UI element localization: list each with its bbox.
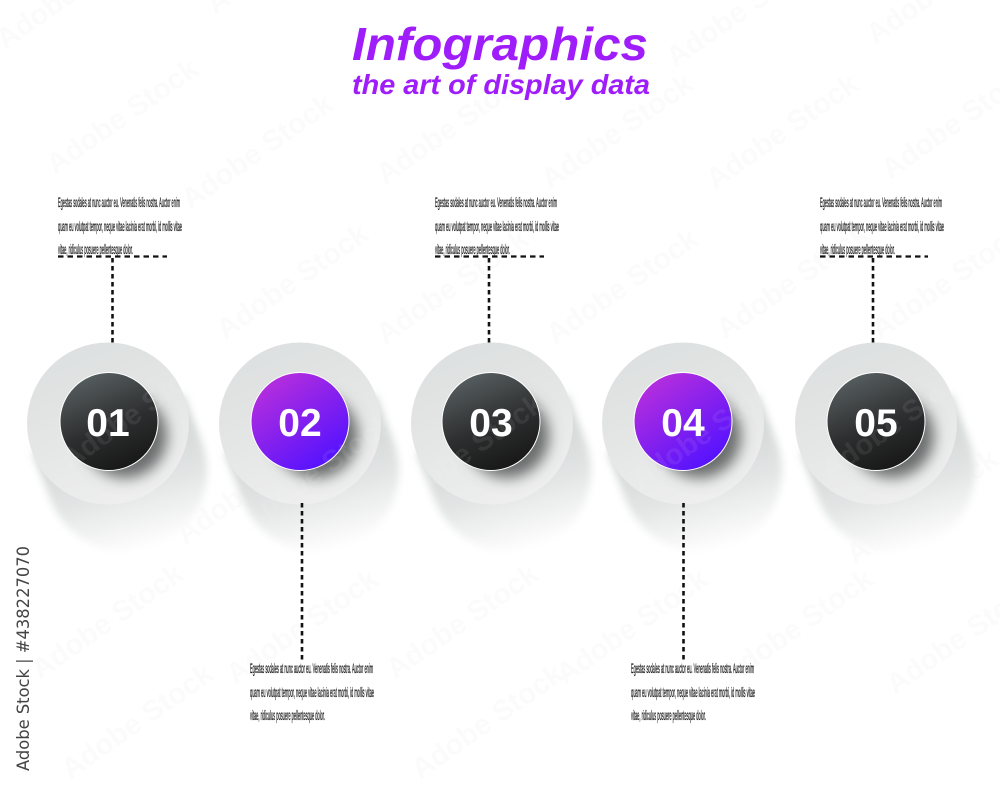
text: quam eu volutpat tempor, neque vitae lacinia erat morbi, id mollis vitae [250,684,374,700]
subheading: the art of display data [352,69,650,100]
watermark pattern: Adobe Stock [41,52,205,181]
watermark over discs: Adobe Stock [816,357,980,486]
underline 01 [58,255,167,258]
text: vitae, ridiculus posuere pellentesque dolor. [631,707,706,723]
watermark over discs: Adobe Stock [236,407,400,536]
connector 03 [488,258,490,344]
title [352,18,650,100]
watermark pattern: Adobe Stock [381,557,545,686]
number 04: 04 [661,402,705,445]
text: Egestas sodales at nunc auctor eu. Venenatis felis nostra. Auctor enim [435,194,557,210]
watermark pattern: Adobe Stock [551,562,715,691]
inner shadow 04 [657,394,741,478]
text: vitae, ridiculus posuere pellentesque dolor. [435,241,510,257]
long shadow 02 [224,394,399,552]
callout text 02 [250,660,374,723]
callout 03 [435,194,559,344]
number badge 04 [634,372,732,470]
inner shadow 01 [83,394,167,478]
text: quam eu volutpat tempor, neque vitae lacinia erat morbi, id mollis vitae [435,218,559,234]
long shadow 04 [607,394,782,552]
number badge 01 [60,372,158,470]
callout 01 [58,194,182,344]
step 05 [795,342,975,552]
number 02: 02 [278,402,322,445]
inner shadow 02 [274,394,358,478]
watermark pattern: Adobe Stock [841,442,1000,571]
number badge 05 [827,372,925,470]
callout text 03 [435,194,559,257]
watermark pattern: Adobe Stock [716,562,880,691]
watermark pattern: Adobe Stock [221,562,385,691]
outer disc 03 [411,342,573,504]
outer disc 05 [795,342,957,504]
text: Egestas sodales at nunc auctor eu. Venenatis felis nostra. Auctor enim [58,194,180,210]
watermark pattern: Adobe Stock [406,657,570,785]
watermark pattern: Adobe Stock [56,657,220,785]
watermark pattern: Adobe Stock [541,222,705,351]
connector 04 [682,503,685,662]
inner shadow 05 [850,394,934,478]
connector 05 [872,258,874,344]
callout 02 [250,503,374,723]
callout text 01 [58,194,182,257]
number badge 03 [442,372,540,470]
watermark pattern: Adobe Stock [211,217,375,346]
watermark over discs: Adobe Stock [56,347,220,476]
connector 02 [301,503,303,662]
outer disc 04 [602,342,764,504]
watermark over discs: Adobe Stock [626,367,790,496]
number 05: 05 [854,402,898,445]
callout 04 [631,503,755,723]
outer disc 01 [27,342,189,504]
watermark pattern: Adobe Stock [26,557,190,686]
text: Egestas sodales at nunc auctor eu. Venenatis felis nostra. Auctor enim [250,660,373,676]
watermark pattern: Adobe Stock [371,62,535,191]
inner shadow 03 [465,394,549,478]
watermark pattern: Adobe Stock [176,87,340,216]
long shadow 05 [800,394,975,552]
number badge 02 [251,372,349,470]
text: quam eu volutpat tempor, neque vitae lacinia erat morbi, id mollis vitae [58,218,182,234]
connector 01 [111,258,114,344]
watermark pattern: Adobe Stock [371,222,535,351]
long shadow 03 [416,394,591,552]
watermark over discs: Adobe Stock [386,387,550,516]
long shadow 01 [32,394,207,552]
step 03 [411,342,591,552]
text: vitae, ridiculus posuere pellentesque dolor. [250,707,325,723]
number 01: 01 [86,402,130,445]
callout 05 [820,194,944,344]
watermark pattern: Adobe Stock [171,422,335,551]
underline 03 [435,255,544,258]
watermark pattern: Adobe Stock [711,217,875,346]
step 01 [27,342,207,552]
step 02 [219,342,399,552]
number 03: 03 [469,402,513,445]
outer disc 02 [219,342,381,504]
watermark over discs [56,347,980,536]
text: vitae, ridiculus posuere pellentesque dolor. [58,241,133,257]
callout text 05 [820,194,944,257]
step 04 [602,342,782,552]
stock id side label: Adobe Stock | #438227070 [14,546,34,771]
heading: Infographics: Infographics [352,18,648,70]
watermark pattern: Adobe Stock [536,67,700,196]
watermark pattern: Adobe Stock [701,67,865,196]
underline 05 [820,255,928,258]
callout text 04 [631,660,755,723]
